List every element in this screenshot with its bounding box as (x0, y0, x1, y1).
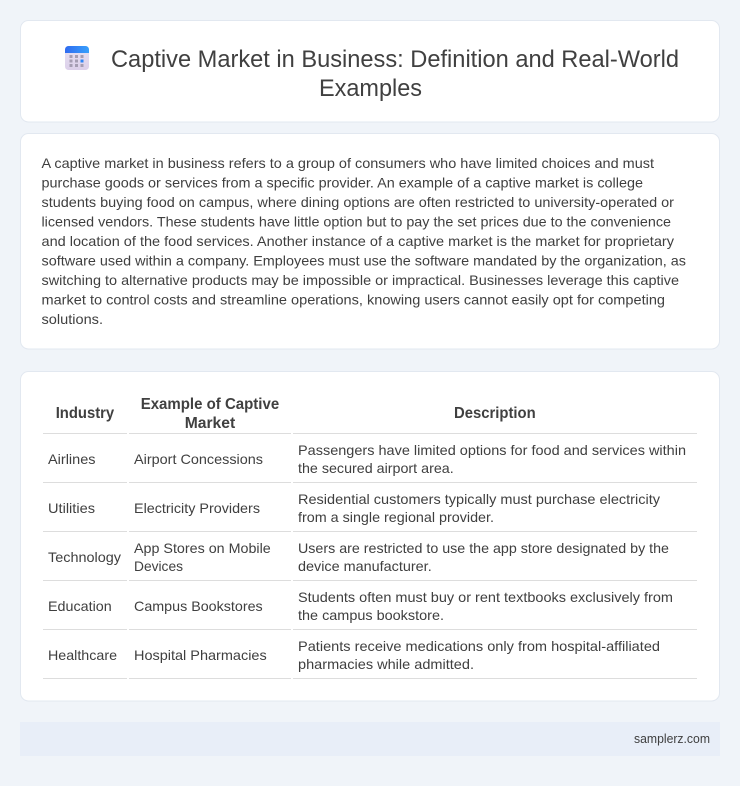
table header row: Market (185, 415, 236, 432)
title: Captive Market in Business: Definition and Real-World (111, 46, 679, 73)
table row: Healthcare: Healthcare (48, 647, 117, 663)
panel: examples table (20, 372, 720, 701)
table row: Healthcare: Patients receive medications only from hospital-affiliated (298, 638, 660, 654)
table row: Technology: Technology (48, 549, 121, 565)
text block: captive market explanation: A captive market in business refers to a group of consumers who have limited choices and must (42, 155, 654, 171)
table row: Education: Campus Bookstores (134, 598, 263, 614)
icon: calendar (65, 46, 89, 70)
table row: Airlines (43, 442, 697, 483)
table row: Airlines: the secured airport area. (298, 460, 454, 476)
text block: captive market explanation: purchase goods or services from a specific provider. An example of a captive market is college (42, 174, 643, 190)
table row: Utilities: from a single regional provider. (298, 509, 494, 525)
table row: Utilities (43, 491, 697, 532)
table row: Technology: App Stores on Mobile (134, 540, 271, 556)
table header row (43, 396, 697, 434)
title (111, 46, 679, 102)
table row: Airlines: Passengers have limited options for food and services within (298, 442, 686, 458)
text block: captive market explanation: software used within a company. Employees must use the software mandated by the organization, as (42, 252, 686, 268)
text block: captive market explanation: solutions. (42, 311, 103, 327)
table row: Technology: device manufacturer. (298, 558, 432, 574)
table row: Healthcare: Hospital Pharmacies (134, 647, 267, 663)
table header row: Industry (56, 405, 114, 422)
table row: Airlines: Airport Concessions (134, 451, 263, 467)
table row: Airlines: Airlines (48, 451, 96, 467)
table row: Technology: Users are restricted to use the app store designated by the (298, 540, 669, 556)
table row: Technology: Devices (134, 558, 183, 574)
footer bar (20, 722, 720, 756)
table row: Education: Education (48, 598, 112, 614)
text block: captive market explanation: students buying food on campus, where dining options are often restricted to university-operated or (42, 194, 674, 210)
table row: Utilities: Residential customers typically must purchase electricity (298, 491, 660, 507)
title: Examples (319, 75, 422, 102)
table row: Education: the campus bookstore. (298, 607, 444, 623)
table row: Utilities: Utilities (48, 500, 95, 516)
table row: Healthcare (43, 638, 697, 679)
text block: captive market explanation: licensed vendors. These students have little option but to pay the set prices due to the convenience (42, 214, 671, 230)
table row: Education (43, 589, 697, 630)
footer source text: samplerz.com (634, 732, 710, 746)
text block: captive market explanation: switching to alternative products may be impossible or impractical. Businesses leverage this captive (42, 272, 679, 288)
text block: captive market explanation (42, 155, 686, 327)
table row: Utilities: Electricity Providers (134, 500, 260, 516)
panel: title header (20, 20, 720, 122)
text block: captive market explanation: market to control costs and streamline operations, knowing users cannot easily opt for competing (42, 292, 665, 308)
text block: captive market explanation: and location of the food services. Another instance of a captive market is the market for proprietary (42, 233, 674, 249)
table row: Healthcare: pharmacies while admitted. (298, 656, 474, 672)
panel: definition paragraph (20, 134, 720, 349)
table row: Education: Students often must buy or rent textbooks exclusively from (298, 589, 673, 605)
table header row: Example of Captive (141, 396, 279, 413)
table row: Technology (43, 540, 697, 581)
table header row: Description (454, 405, 536, 422)
